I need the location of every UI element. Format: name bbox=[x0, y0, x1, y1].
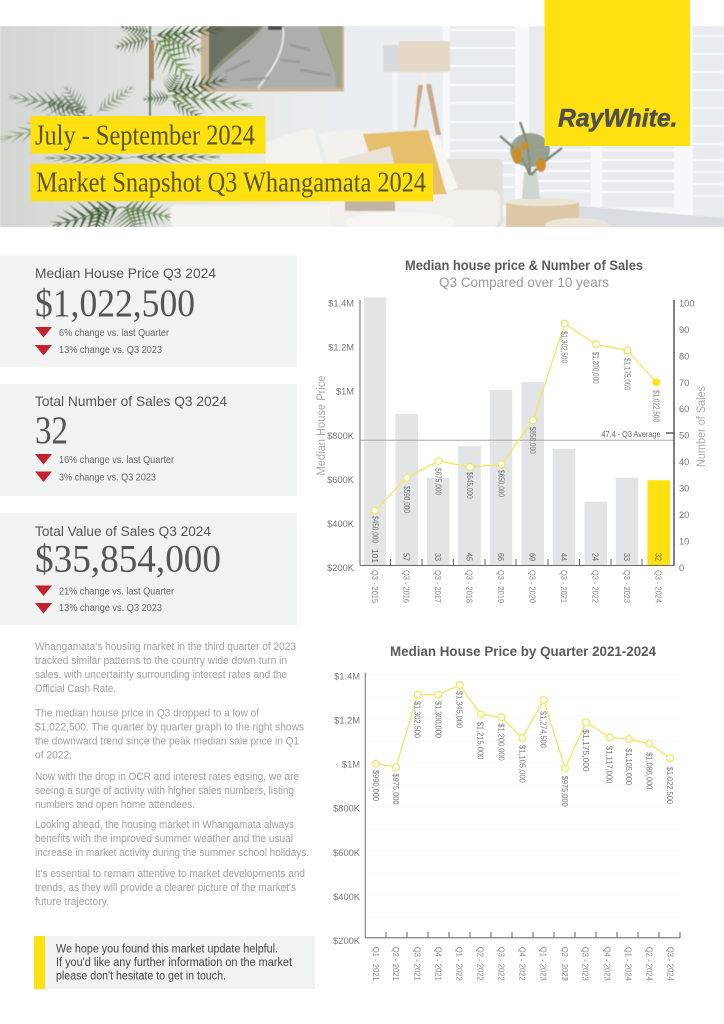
price value labels: $1,175,000 bbox=[622, 358, 632, 390]
text block: market commentary: It's essential to remain attentive to market developments and bbox=[35, 868, 305, 880]
y axis labels: $1M bbox=[342, 760, 360, 770]
price value labels: $1,300,000 bbox=[433, 701, 442, 739]
text block: market commentary: Looking ahead, the housing market in Whangamata always bbox=[35, 819, 294, 831]
bars: number of sales bbox=[364, 298, 670, 566]
quarter labels: Q2 - 2023 bbox=[560, 947, 570, 981]
right axis labels: 60 bbox=[679, 404, 689, 414]
text block: market commentary: $1,022,500. The quarter by quarter graph to the right shows bbox=[35, 722, 304, 734]
text block: market commentary: benefits with the improved summer weather and the usual bbox=[35, 833, 293, 845]
sales count labels: 45 bbox=[464, 553, 474, 561]
quarter labels: Q3 - 2017 bbox=[433, 570, 443, 603]
right axis labels bbox=[679, 298, 695, 573]
axes bbox=[360, 300, 674, 566]
price value labels: $1,200,000 bbox=[497, 723, 506, 761]
panel: total value of sales bbox=[0, 513, 297, 625]
panel: median house price: Median House Price Q3 2024 bbox=[35, 265, 216, 281]
painting of a road bbox=[201, 26, 344, 92]
panel: total value of sales: Total Value of Sales Q3 2024 bbox=[35, 523, 211, 539]
shutters bbox=[443, 26, 724, 227]
chart heading: Median house price & Number of Sales bbox=[405, 258, 643, 273]
sales count labels: 24 bbox=[591, 553, 601, 561]
text block: market commentary: tracked similar patterns to the country wide down turn in bbox=[35, 655, 287, 667]
text block: market commentary: seeing a surge of activity with higher sales numbers, listing bbox=[35, 785, 294, 797]
left axis labels: $400K bbox=[327, 519, 355, 529]
sales count labels: 33 bbox=[622, 553, 632, 561]
average line: 47.4 - Q3 Average bbox=[602, 429, 661, 439]
palm plant bbox=[0, 26, 254, 227]
sales count labels: 44 bbox=[559, 553, 569, 561]
right axis labels: 20 bbox=[679, 510, 689, 520]
price value labels: $1,022,500 bbox=[652, 390, 660, 422]
price value labels: $1,215,000 bbox=[476, 722, 485, 760]
quarter labels: Q1 - 2022 bbox=[455, 947, 465, 981]
panel: total value of sales: 21% change vs. last Quarter bbox=[59, 587, 175, 598]
price value labels: $1,105,000 bbox=[517, 745, 526, 783]
quarter labels: Q3 - 2019 bbox=[496, 570, 506, 603]
right axis labels: 70 bbox=[679, 378, 689, 388]
quarter labels: Q3 - 2022 bbox=[591, 570, 601, 603]
panel: total number of sales: 16% change vs. last Quarter bbox=[59, 455, 175, 466]
text block: market commentary bbox=[35, 641, 309, 908]
quarter labels: Q3 - 2023 bbox=[622, 570, 632, 603]
panel: total number of sales: Total Number of Sales Q3 2024 bbox=[35, 393, 227, 409]
quarter labels: Q3 - 2023 bbox=[581, 947, 591, 981]
callout: get in touch: please don't hesitate to get in touch. bbox=[56, 970, 226, 982]
left axis labels: $600K bbox=[327, 475, 355, 485]
quarter labels: Q1 - 2023 bbox=[539, 947, 549, 981]
price line bbox=[373, 682, 673, 772]
text block: market commentary: trends, as they will provide a clearer picture of the market's bbox=[35, 882, 296, 894]
price value labels: $1,302,500 bbox=[560, 331, 568, 363]
quarter labels: Q2 - 2022 bbox=[476, 947, 486, 981]
quarter labels: Q1 - 2024 bbox=[624, 947, 634, 981]
chart heading bbox=[405, 258, 643, 290]
panel: total value of sales: $35,854,000 bbox=[35, 538, 221, 581]
sales count labels bbox=[370, 549, 664, 563]
side table bbox=[506, 198, 609, 227]
quarter labels bbox=[371, 947, 675, 981]
text block: market commentary: The median house price in Q3 dropped to a low of bbox=[35, 708, 260, 720]
quarter labels: Q3 - 2015 bbox=[370, 570, 380, 603]
panel: total number of sales: 32 bbox=[35, 409, 68, 452]
right axis labels: 10 bbox=[679, 536, 689, 546]
left axis labels: $1M bbox=[336, 386, 354, 396]
axis title: median house price: Median House Price bbox=[316, 376, 328, 476]
right axis labels: 40 bbox=[679, 457, 689, 467]
price value labels: $990,000 bbox=[371, 770, 380, 802]
quarter labels: Q3 - 2024 bbox=[654, 570, 664, 603]
price value labels: $645,000 bbox=[465, 472, 474, 499]
right axis labels: 50 bbox=[679, 430, 689, 440]
panel: total number of sales: 3% change vs. Q3 2023 bbox=[59, 473, 156, 484]
text block: market commentary: Official Cash Rate. bbox=[35, 683, 116, 695]
chart heading: Median House Price by Quarter 2021-2024 bbox=[390, 644, 656, 659]
chart: median house price by quarter bbox=[333, 644, 680, 981]
y axis labels: $1.2M bbox=[334, 716, 360, 726]
y axis labels bbox=[333, 672, 361, 946]
text block: market commentary: Now with the drop in OCR and interest rates easing, we are bbox=[35, 771, 299, 783]
quarter labels: Q4 - 2021 bbox=[434, 947, 444, 981]
vase with flowers bbox=[500, 122, 562, 199]
text block: market commentary: the downward trend since the peak median sale price in Q1 bbox=[35, 736, 299, 748]
price value labels bbox=[370, 331, 660, 543]
callout: get in touch: If you'd like any further information on the market bbox=[56, 957, 293, 969]
sofa and cushions bbox=[170, 129, 503, 232]
left axis labels bbox=[327, 298, 355, 573]
price value labels: $1,345,000 bbox=[455, 691, 464, 729]
right axis labels: 90 bbox=[679, 325, 689, 335]
price value labels: $675,000 bbox=[434, 468, 442, 495]
left axis labels: $1.4M bbox=[328, 298, 354, 308]
logo: Ray White: RayWhite. bbox=[558, 105, 678, 133]
sales count labels: 33 bbox=[433, 553, 443, 561]
text block: market commentary: sales, with uncertainty surrounding interest rates and the bbox=[35, 669, 287, 681]
price value labels: $450,000 bbox=[370, 516, 380, 543]
price line bbox=[372, 320, 660, 514]
quarter labels: Q3 - 2020 bbox=[528, 570, 538, 603]
chart: median house price and number of sales bbox=[316, 258, 708, 603]
text block: market commentary: Whangamata's housing market in the third quarter of 2023 bbox=[35, 641, 296, 653]
title: date range: July - September 2024 bbox=[35, 120, 255, 151]
quarter labels: Q3 - 2021 bbox=[559, 570, 569, 603]
sales count labels: 101 bbox=[370, 549, 380, 563]
quarter labels: Q3 - 2022 bbox=[497, 947, 507, 981]
sales count labels: 69 bbox=[528, 553, 538, 561]
quarter labels bbox=[370, 570, 664, 603]
right axis labels: 30 bbox=[679, 484, 689, 494]
callout: get in touch bbox=[34, 936, 315, 989]
price value labels: $1,274,500 bbox=[539, 711, 548, 748]
y axis labels: $400K bbox=[333, 892, 361, 902]
logo panel bbox=[544, 0, 690, 146]
text block: market commentary: numbers and open home attendees. bbox=[35, 799, 195, 811]
text block: market commentary: of 2022. bbox=[35, 750, 72, 762]
panel: median house price: 6% change vs. last Quarter bbox=[59, 328, 170, 339]
title: market snapshot: Market Snapshot Q3 Whangamata 2024 bbox=[36, 168, 426, 199]
sales count labels: 57 bbox=[402, 553, 412, 561]
quarter labels: Q3 - 2016 bbox=[402, 570, 412, 603]
panel: total value of sales: 13% change vs. Q3 2023 bbox=[59, 603, 162, 614]
price value labels: $1,105,000 bbox=[624, 748, 633, 785]
quarter labels: Q2 - 2024 bbox=[644, 947, 654, 981]
y axis labels: $200K bbox=[333, 936, 361, 946]
quarter labels: Q3 - 2021 bbox=[413, 947, 423, 981]
quarter labels: Q4 - 2023 bbox=[603, 947, 613, 981]
price value labels: $1,302,500 bbox=[413, 701, 422, 739]
price value labels: $975,000 bbox=[560, 776, 569, 807]
left axis labels: $200K bbox=[327, 563, 355, 573]
panel: median house price: 13% change vs. Q3 2023 bbox=[59, 345, 162, 356]
price value labels: $1,022,500 bbox=[665, 767, 674, 805]
price value labels bbox=[371, 691, 674, 807]
axis title: number of sales: Number of Sales bbox=[696, 386, 708, 467]
price value labels: $1,200,000 bbox=[591, 352, 600, 384]
price value labels: $1,117,000 bbox=[605, 746, 614, 784]
sales count labels: 32 bbox=[654, 553, 664, 561]
text block: market commentary: future trajectory. bbox=[35, 896, 109, 908]
price value labels: $975,000 bbox=[391, 774, 400, 805]
price value labels: $590,000 bbox=[402, 486, 411, 513]
price value labels: $650,000 bbox=[496, 470, 506, 497]
floor lamp bbox=[383, 41, 450, 135]
chart heading: Q3 Compared over 10 years bbox=[439, 274, 609, 290]
y axis labels: $800K bbox=[333, 804, 361, 814]
quarter labels: Q3 - 2018 bbox=[464, 570, 474, 603]
quarter labels: Q4 - 2022 bbox=[518, 947, 528, 981]
panel: total number of sales bbox=[0, 384, 297, 496]
quarter labels: Q1 - 2021 bbox=[371, 947, 381, 981]
right axis labels: 80 bbox=[679, 352, 689, 362]
left axis labels: $800K bbox=[327, 431, 355, 441]
quarter labels: Q2 - 2021 bbox=[391, 947, 401, 981]
quarter labels: Q3 - 2024 bbox=[665, 947, 675, 981]
price value labels: $1,175,000 bbox=[581, 729, 590, 772]
axes bbox=[365, 673, 680, 938]
right axis labels: 0 bbox=[679, 563, 684, 573]
sales count labels: 66 bbox=[496, 553, 506, 561]
left axis labels: $1.2M bbox=[328, 342, 354, 352]
price value labels: $1,086,000 bbox=[644, 752, 653, 790]
price value labels: $858,000 bbox=[528, 427, 537, 454]
hero photo: living room bbox=[0, 26, 724, 227]
text block: market commentary: increase in market activity during the summer school holidays. bbox=[35, 847, 309, 859]
y axis labels: $1.4M bbox=[334, 672, 360, 682]
callout: get in touch: We hope you found this market update helpful. bbox=[56, 944, 278, 956]
right axis labels: 100 bbox=[679, 298, 695, 308]
panel: median house price: $1,022,500 bbox=[35, 282, 195, 325]
y axis labels: $600K bbox=[333, 848, 361, 858]
panel: median house price bbox=[0, 256, 297, 367]
